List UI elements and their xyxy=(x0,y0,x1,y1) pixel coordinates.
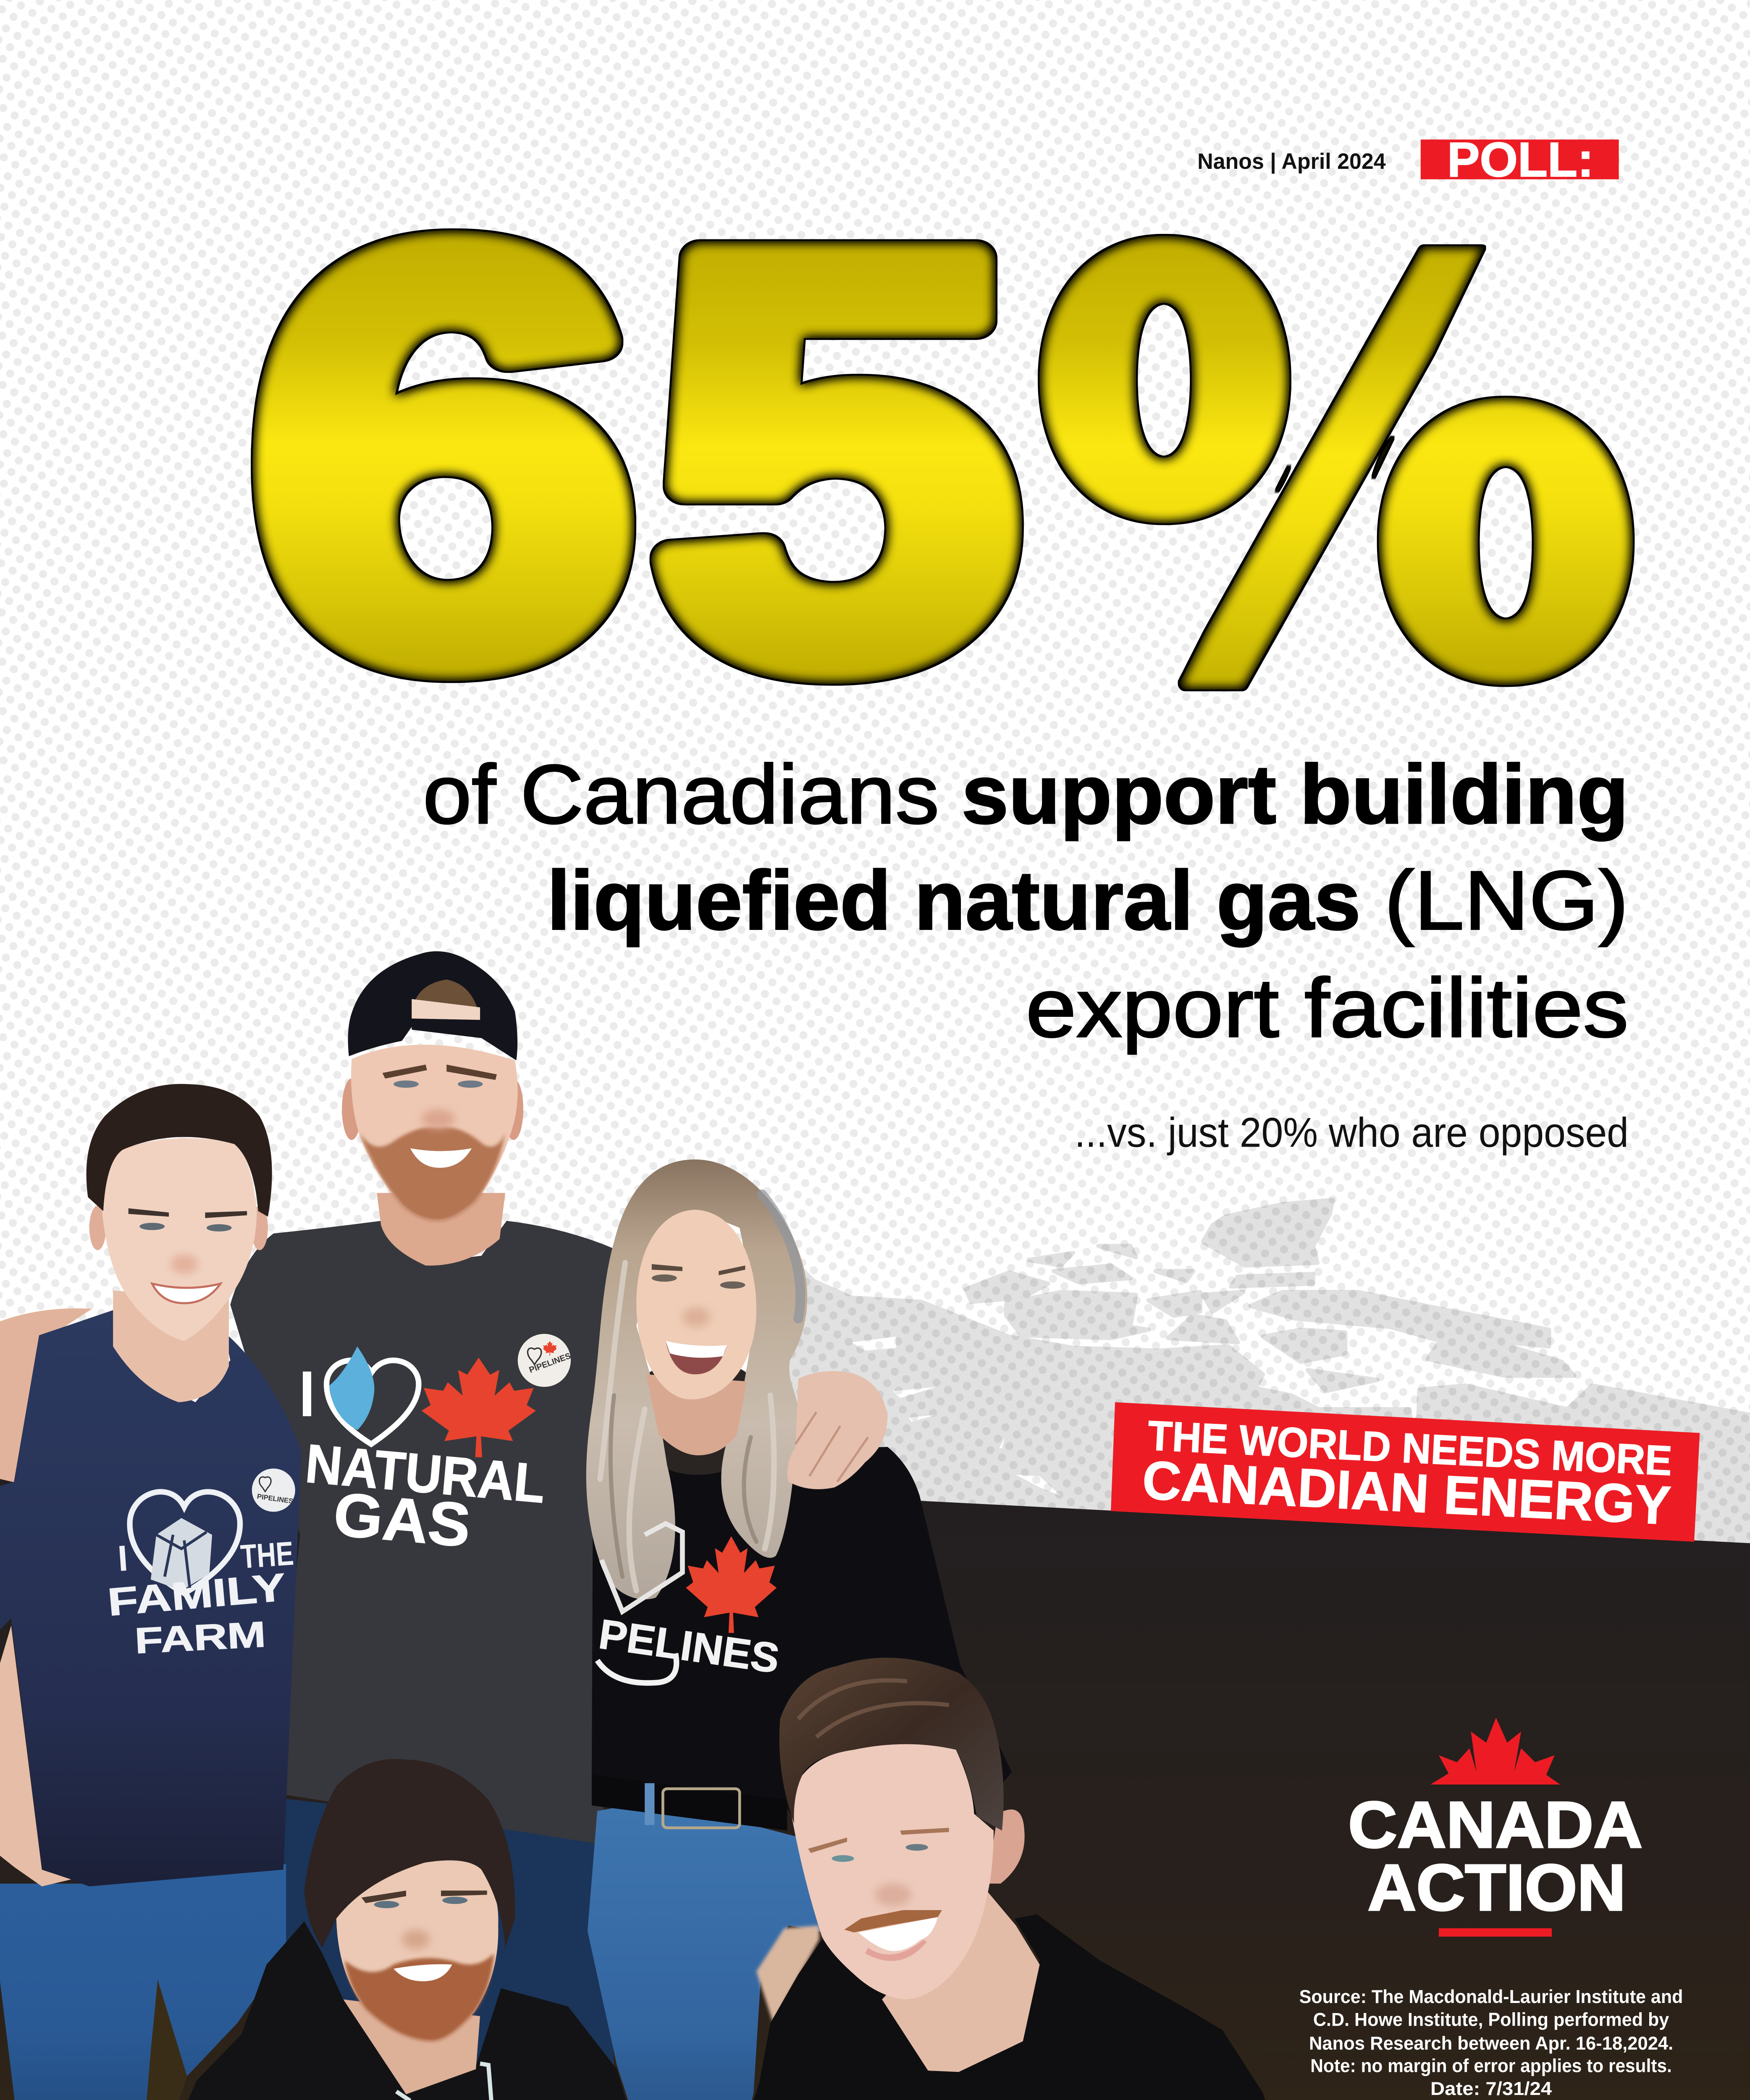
subheading: ...vs. just 20% who are opposed xyxy=(1075,1110,1629,1156)
mouth xyxy=(394,1964,452,1981)
t-shirt xyxy=(0,1310,302,1886)
neck xyxy=(343,2000,480,2094)
neck xyxy=(377,1193,505,1265)
shirt logo: NATURAL xyxy=(303,1433,548,1515)
shirt logo: PELINES xyxy=(596,1611,782,1682)
eyes and brows xyxy=(382,1065,497,1088)
t-shirt xyxy=(726,1914,1291,2100)
shirt logo: I xyxy=(116,1538,129,1579)
big number 65%: 5 xyxy=(653,134,1019,782)
nose shadow xyxy=(170,1255,198,1274)
person: woman xyxy=(586,1160,1012,2100)
hair xyxy=(87,1084,272,1217)
source note: Date: 7/31/24 xyxy=(1430,2078,1552,2099)
photo: five young people xyxy=(0,951,1291,2100)
logo: Canada Action: CANADA xyxy=(1348,1788,1642,1861)
source note xyxy=(1299,1986,1683,2099)
shadow under hair xyxy=(625,1357,770,1475)
long hair xyxy=(586,1160,807,1599)
face xyxy=(636,1210,756,1399)
ears xyxy=(89,1205,106,1250)
belt xyxy=(592,1775,787,1831)
banner: CANADIAN ENERGY xyxy=(1141,1450,1672,1536)
hair strands xyxy=(600,1194,800,1591)
neck xyxy=(113,1291,229,1402)
big number 65%: % xyxy=(1097,121,1570,812)
button xyxy=(252,1468,295,1512)
beanie xyxy=(304,1759,515,1948)
drawstrings xyxy=(396,2063,498,2100)
logo: Canada Action xyxy=(1348,1717,1642,1937)
headline: export facilities xyxy=(1026,961,1629,1055)
arm and hand around left man xyxy=(0,1308,92,1485)
face xyxy=(351,1045,518,1221)
map of northern Canada xyxy=(782,1200,1750,1549)
shirt logo xyxy=(303,1347,548,1560)
eyes and brows xyxy=(652,1264,745,1289)
t-shirt xyxy=(592,1447,1012,1856)
eyes and brows xyxy=(362,1890,487,1908)
button: PIPELINES xyxy=(528,1351,572,1375)
mouth xyxy=(858,1917,938,1951)
person: centre man with cap xyxy=(230,951,614,1845)
nose shadow xyxy=(875,1884,911,1906)
date line: Nanos | April 2024 xyxy=(1197,149,1386,174)
poll tag: POLL: xyxy=(1447,132,1594,187)
person: kneeling man in beanie xyxy=(151,1759,652,2100)
moustache xyxy=(844,1910,942,1932)
icon: maple leaf xyxy=(1430,1717,1560,1785)
big number 65% xyxy=(251,228,1635,691)
headline: of Canadians xyxy=(423,748,939,841)
person: left man xyxy=(0,1084,302,1886)
big number 65%: 6 xyxy=(250,129,637,780)
nose shadow xyxy=(402,1929,430,1949)
face xyxy=(791,1744,994,2000)
hoodie xyxy=(151,1921,652,2100)
button xyxy=(518,1334,572,1387)
shirt logo xyxy=(106,1492,295,1662)
source note: C.D. Howe Institute, Polling performed by xyxy=(1313,2009,1669,2030)
banner xyxy=(1111,1402,1700,1542)
headline xyxy=(423,748,1629,1055)
shirt logo: THE xyxy=(239,1534,295,1575)
person: front right man xyxy=(726,1658,1291,2100)
shirt logo: FARM xyxy=(134,1614,267,1662)
eyes and brows xyxy=(808,1828,949,1862)
person: man in back jeans xyxy=(283,1798,614,2065)
ear xyxy=(987,1809,1025,1884)
hand behind right man xyxy=(756,1925,819,2023)
eyes and brows xyxy=(129,1208,247,1231)
button: PIPELINES xyxy=(257,1492,294,1505)
face xyxy=(100,1138,257,1341)
source note: Nanos Research between Apr. 16-18,2024. xyxy=(1309,2032,1673,2054)
nose shadow xyxy=(422,1109,455,1129)
hair xyxy=(779,1658,1004,1831)
left arm and hand xyxy=(0,1625,71,1886)
dark lower panel xyxy=(0,1454,1750,2100)
neck xyxy=(882,1890,1040,2072)
beard xyxy=(345,1953,494,2041)
source note: Source: The Macdonald-Laurier Institute and xyxy=(1299,1986,1683,2007)
jeans xyxy=(588,1800,824,2100)
mouth xyxy=(666,1341,727,1374)
t-shirt xyxy=(230,1221,614,1845)
headline: support building xyxy=(962,748,1629,841)
nose shadow xyxy=(682,1307,710,1327)
mouth xyxy=(152,1284,220,1303)
headline: liquefied natural gas xyxy=(547,854,1361,947)
ears xyxy=(342,1079,362,1140)
source note: Note: no margin of error applies to results. xyxy=(1310,2055,1672,2076)
shirt logo: FAMILY xyxy=(106,1565,288,1624)
face xyxy=(336,1860,499,2041)
headline: (LNG) xyxy=(1384,854,1629,947)
shirt logo xyxy=(596,1524,782,1683)
banner: THE WORLD NEEDS MORE xyxy=(1147,1412,1673,1485)
cap xyxy=(348,951,517,1060)
hand on shoulder xyxy=(787,1371,887,1489)
neck xyxy=(646,1374,747,1455)
shirt logo: GAS xyxy=(331,1480,473,1560)
person: left man jeans xyxy=(0,1864,286,2100)
mouth xyxy=(410,1148,472,1168)
logo: Canada Action: ACTION xyxy=(1368,1851,1626,1924)
beard xyxy=(360,1127,505,1221)
